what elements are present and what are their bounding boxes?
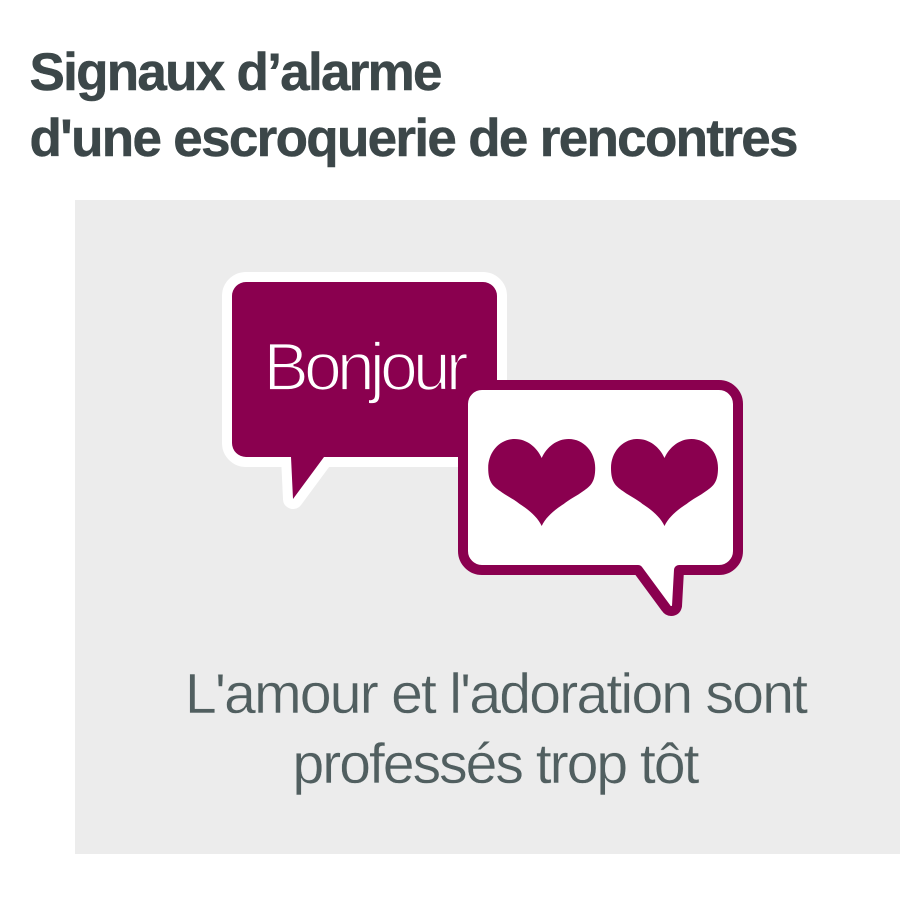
caption text: L'amour et l'adoration sont <box>185 662 808 726</box>
title: d'une escroquerie de rencontres <box>30 109 798 168</box>
caption text <box>185 662 808 796</box>
panel: grey background <box>75 200 900 854</box>
title: Signaux d’alarme <box>30 43 442 102</box>
caption text: professés trop tôt <box>292 732 700 796</box>
icon: right heart <box>611 439 718 526</box>
icon: Bonjour speech bubble <box>232 282 497 499</box>
bubble text: Bonjour: Bonjour <box>264 329 468 405</box>
title <box>30 43 798 168</box>
icon: hearts speech bubble <box>463 385 738 611</box>
icon: left heart <box>488 439 595 526</box>
